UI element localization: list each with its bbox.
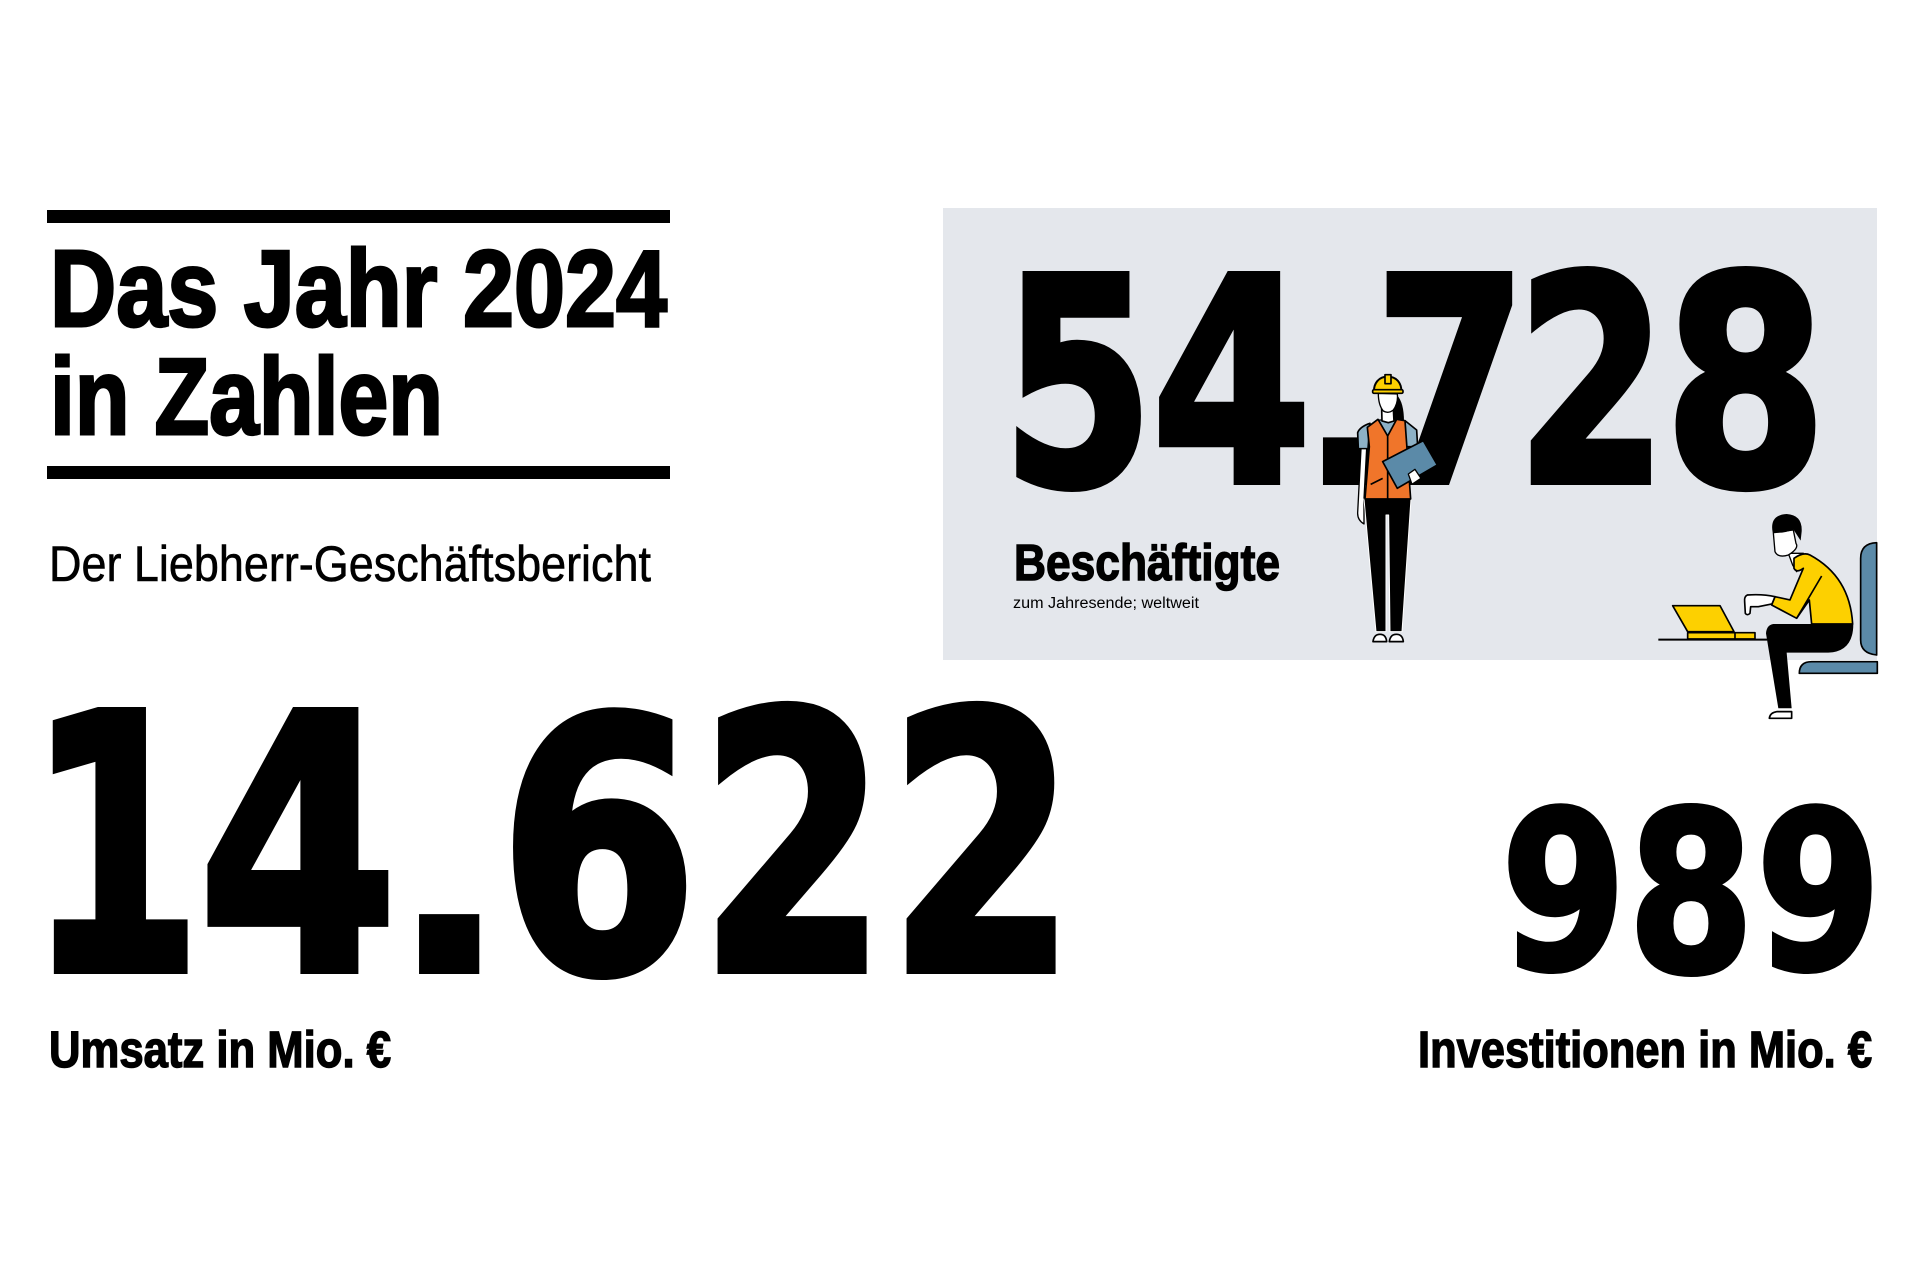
number: 14.622: 2 — [700, 640, 887, 1054]
icon: woman with helmet and clipboard — [1358, 375, 1437, 642]
number: 14.622: 6 — [499, 647, 698, 1054]
number: 989: 9 — [1756, 766, 1881, 1021]
number: 54.728: 5 — [1002, 218, 1153, 553]
number: 54.728: 7 — [1375, 218, 1527, 549]
number: 54.728: 8 — [1664, 216, 1827, 554]
number: 54.728 — [1002, 216, 1827, 554]
title block with rules — [47, 210, 670, 479]
number: 14.622: . — [392, 709, 506, 1037]
title line 1: Das Jahr 2024 — [50, 228, 667, 350]
number: 54.728: 4 — [1152, 219, 1312, 550]
title line 2: in Zahlen — [50, 336, 443, 458]
number: 14.622 — [28, 640, 1076, 1054]
sublabel: zum Jahresende; weltweit — [1013, 595, 1200, 612]
label: Beschäftigte: Beschäftigte — [1014, 534, 1280, 591]
number: 14.622: 1 — [28, 642, 202, 1054]
panel: employees — [943, 208, 1877, 660]
number: 54.728: 2 — [1516, 216, 1667, 549]
number: 54.728: . — [1301, 276, 1394, 536]
label: Umsatz: Umsatz in Mio. € — [49, 1021, 391, 1078]
number: 14.622: 2 — [888, 640, 1076, 1054]
number: 989 — [1501, 764, 1881, 1024]
number: 989: 9 — [1501, 766, 1626, 1021]
number: 989: 8 — [1628, 764, 1754, 1024]
number: 14.622: 4 — [198, 641, 398, 1054]
subtitle: Der Liebherr-Geschäftsbericht — [49, 536, 651, 592]
icon: man seated at laptop — [1658, 514, 1877, 718]
